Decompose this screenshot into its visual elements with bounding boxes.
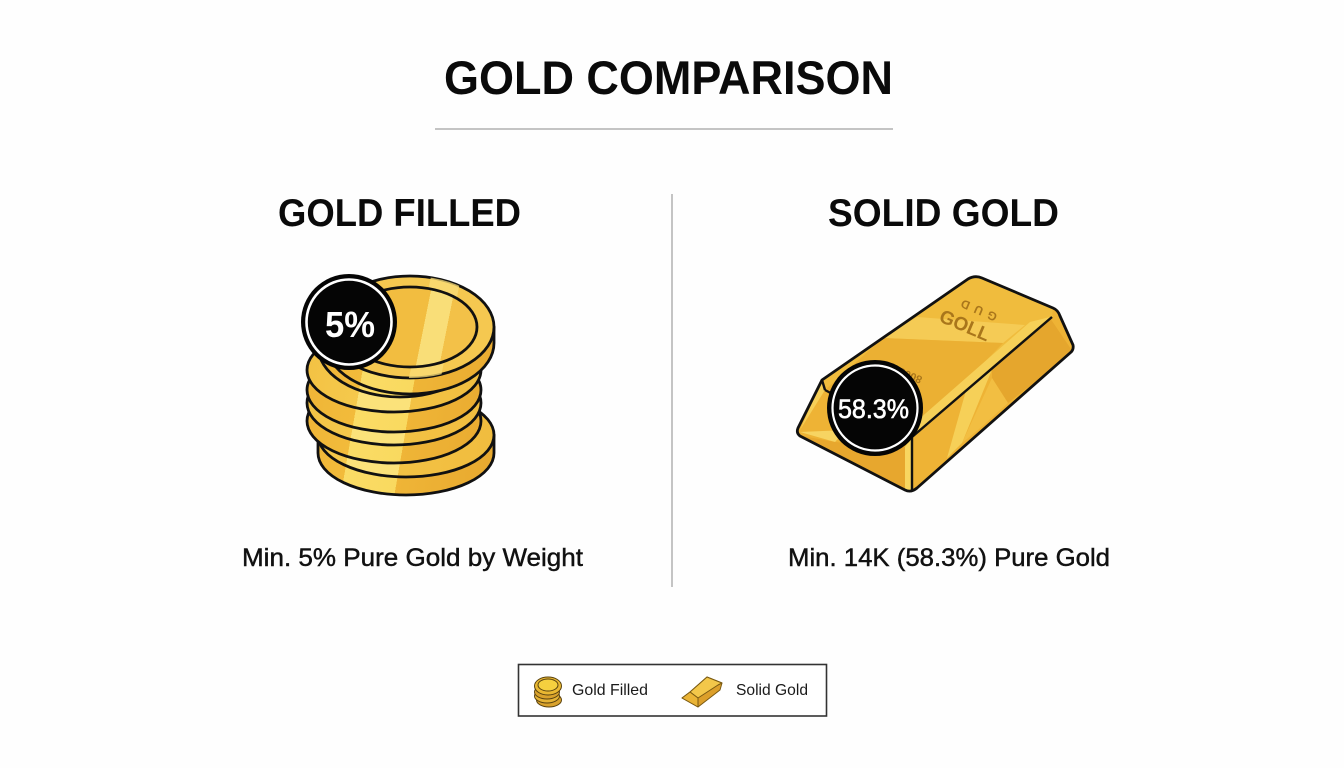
legend xyxy=(518,664,826,716)
infographic canvas xyxy=(244,61,1108,717)
icon: stack of gold coins xyxy=(307,272,494,495)
panel: solid gold xyxy=(788,192,1110,572)
heading: gold filled: GOLD FILLED xyxy=(278,192,521,235)
legend icon: gold bar xyxy=(682,677,722,707)
icon: gold bar xyxy=(797,277,1073,491)
legend label: gold filled: Gold Filled xyxy=(572,682,648,699)
caption: solid gold: Min. 14K (58.3%) Pure Gold xyxy=(788,544,1110,572)
badge: 5% xyxy=(301,274,397,370)
badge: 58.3% xyxy=(827,360,923,456)
heading: solid gold: SOLID GOLD xyxy=(828,192,1059,235)
legend label: solid gold: Solid Gold xyxy=(736,682,808,699)
bar stamp word: GOLL xyxy=(936,306,993,346)
legend icon: coins xyxy=(534,677,562,707)
panel: gold filled xyxy=(242,192,583,572)
badge: 5%: 5% xyxy=(325,304,375,345)
caption: gold filled: Min. 5% Pure Gold by Weight xyxy=(242,544,583,572)
badge: 58.3%: 58.3% xyxy=(838,394,909,424)
bar stamp text, upside down: GUD xyxy=(958,296,999,324)
bar stamp number, upside down: 8003 xyxy=(897,365,924,385)
title: GOLD COMPARISON xyxy=(444,51,893,104)
